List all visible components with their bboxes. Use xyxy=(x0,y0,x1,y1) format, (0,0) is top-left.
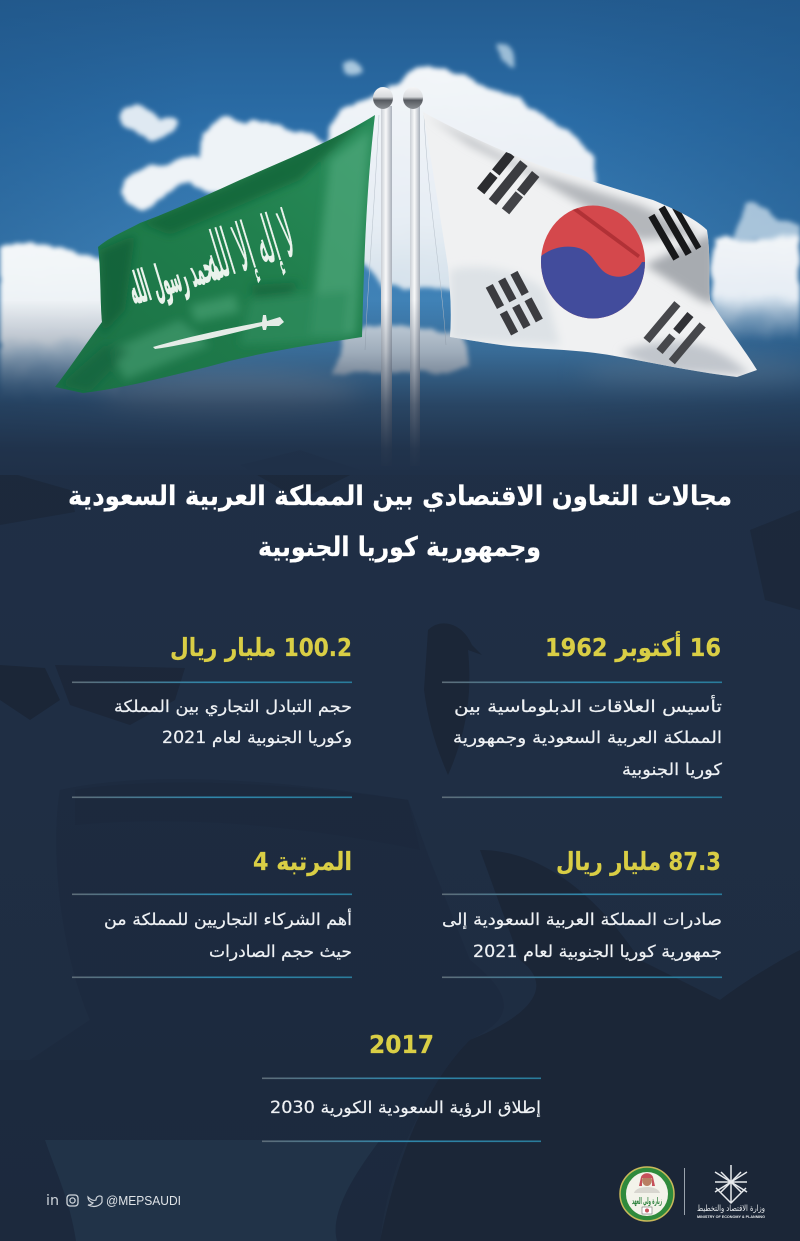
panel: rank: المرتبة 4 xyxy=(253,847,352,877)
icon: instagram xyxy=(67,1195,78,1206)
panel: diplomatic relations xyxy=(442,631,722,798)
trigrams xyxy=(476,150,706,364)
Saudi flag xyxy=(55,115,375,393)
flag shahada inscription: محمد رسول الله xyxy=(122,238,225,315)
icon: ministry emblem xyxy=(715,1165,747,1203)
panel: diplomatic relations: كوريا الجنوبية xyxy=(622,760,722,780)
panel: diplomatic relations: تأسيس العلاقات الدبلوماسية بين xyxy=(454,695,722,717)
panel: rank xyxy=(72,847,352,978)
lower haze clouds xyxy=(100,359,800,417)
panel: exports: 87.3 مليار ريال xyxy=(556,847,721,876)
panel: rank: حيث حجم الصادرات xyxy=(209,942,352,962)
panel: exports: صادرات المملكة العربية السعودية إلى xyxy=(442,910,722,930)
taegeuk xyxy=(541,206,645,318)
panel: rank: أهم الشركاء التجاريين للمملكة من xyxy=(104,908,352,930)
title: مجالات التعاون الاقتصادي بين المملكة العربية السعودية xyxy=(68,481,732,512)
panel: 2017 vision: إطلاق الرؤية السعودية الكورية 2030 xyxy=(270,1098,541,1118)
icon: linkedin: in xyxy=(46,1193,59,1209)
halyard ropes xyxy=(365,115,446,350)
flag shahada inscription: لا إله إلا الله xyxy=(194,196,303,297)
panel: trade volume: حجم التبادل التجاري بين المملكة xyxy=(114,697,352,717)
handle text: @MEPSAUDI xyxy=(106,1193,181,1208)
panel: trade volume xyxy=(72,633,352,798)
seal: visit emblem xyxy=(620,1167,674,1221)
clouds xyxy=(0,45,800,400)
title xyxy=(68,481,732,563)
South Korean flag xyxy=(420,110,765,385)
ministry name: وزارة الاقتصاد والتخطيط xyxy=(697,1204,765,1214)
seal: visit emblem: زيارة ولي العهد xyxy=(632,1197,662,1207)
panel: exports xyxy=(442,847,722,978)
panel: diplomatic relations: المملكة العربية السعودية وجمهورية xyxy=(453,728,722,748)
ministry logo xyxy=(697,1165,765,1219)
dark fade into background xyxy=(0,300,800,475)
ministry logo: MINISTRY OF ECONOMY & PLANNING xyxy=(697,1214,765,1219)
icon: twitter xyxy=(88,1196,102,1206)
social handle xyxy=(46,1193,181,1209)
flag shahada inscription xyxy=(132,206,293,306)
panel: trade volume: 100.2 مليار ريال xyxy=(170,633,352,662)
panel: 2017 vision: 2017 xyxy=(369,1030,434,1059)
flag sword xyxy=(153,315,284,349)
divider xyxy=(684,1168,685,1215)
panel: 2017 vision xyxy=(262,1030,541,1142)
title: وجمهورية كوريا الجنوبية xyxy=(258,532,541,563)
flag poles xyxy=(365,87,446,466)
panel: trade volume: وكوريا الجنوبية لعام 2021 xyxy=(162,728,352,748)
panel: exports: جمهورية كوريا الجنوبية لعام 2021 xyxy=(473,942,722,962)
panel: diplomatic relations: 16 أكتوبر 1962 xyxy=(545,631,721,663)
map land xyxy=(0,450,800,1241)
